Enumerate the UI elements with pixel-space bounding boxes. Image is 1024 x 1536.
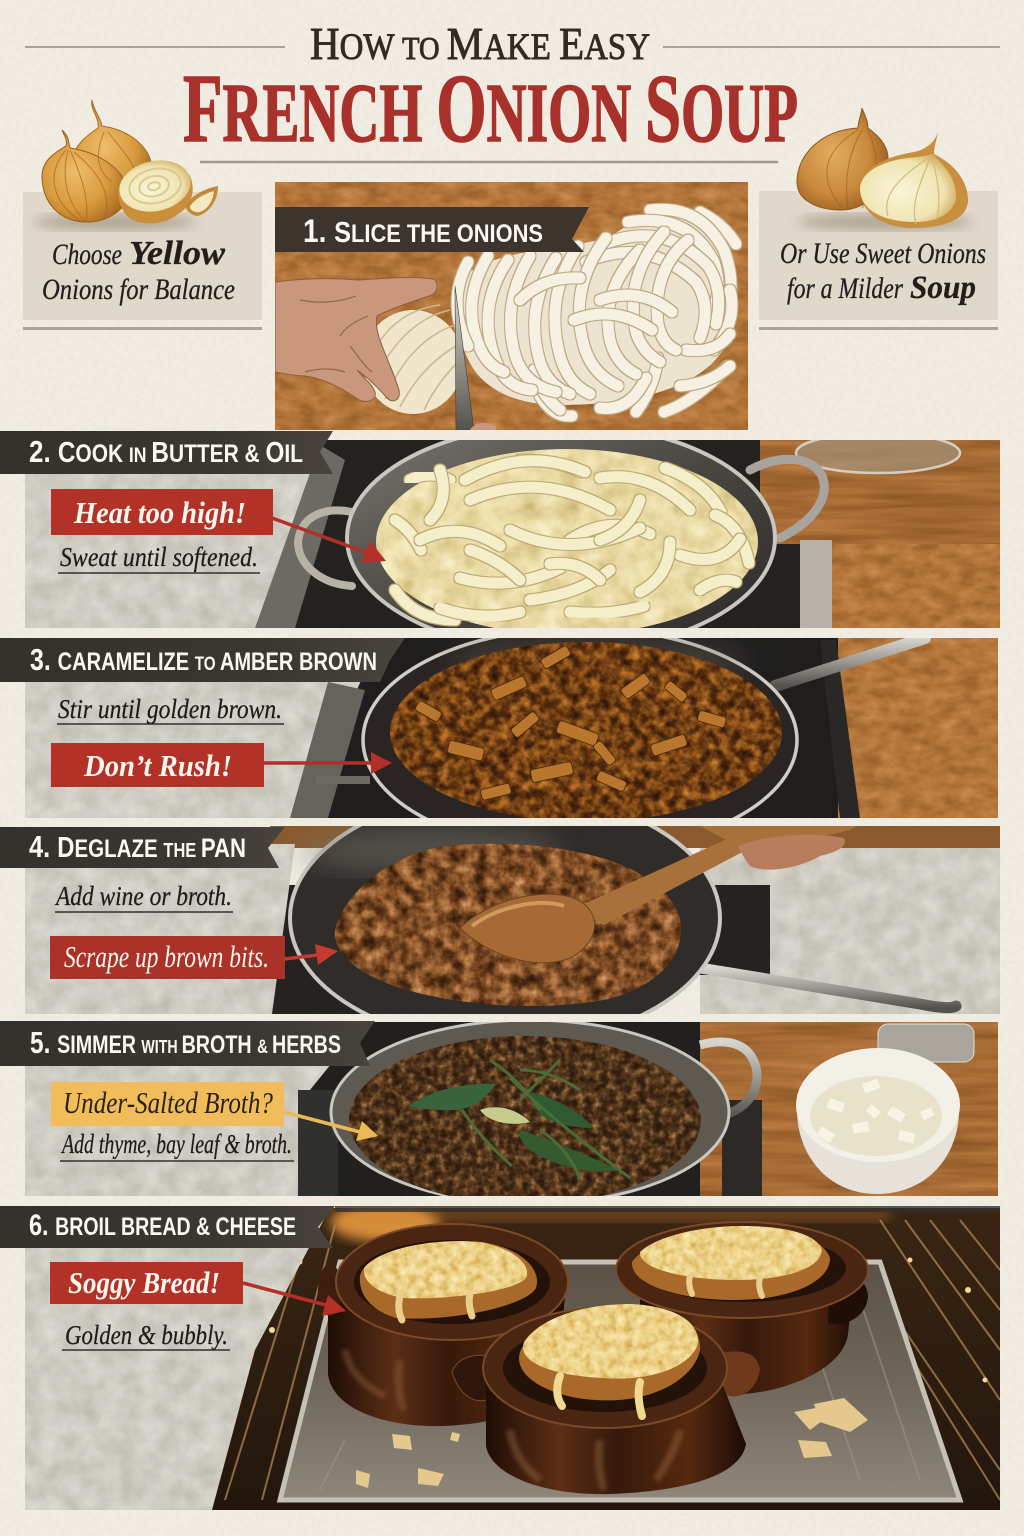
arrow: scrape to pan — [284, 944, 338, 965]
arrow: heat to onions — [272, 518, 386, 563]
banner: step 5: 5. SIMMER WITH BROTH & HERBS — [30, 1025, 341, 1060]
photo: bowl of chopped onions — [796, 1024, 974, 1194]
title block: FRENCH ONION SOUP — [183, 55, 798, 163]
panel: step 2 cook in butter and oil — [0, 431, 1000, 628]
callout: don't rush: Don’t Rush! — [83, 748, 232, 783]
note: sweat until softened: Sweat until softened. — [60, 542, 258, 572]
note: add thyme bay leaf and broth: Add thyme, bay leaf & broth. — [61, 1129, 292, 1159]
label: choose yellow: Choose — [52, 238, 122, 271]
panel: step 4 deglaze — [0, 826, 1000, 1014]
photo: pan with deglazing onions — [288, 826, 722, 1014]
arrow: broth to soup — [284, 1112, 378, 1141]
banner: step 1: 1. SLICE THE ONIONS — [303, 213, 543, 249]
banner: step 2: 2. COOK IN BUTTER & OIL — [29, 434, 303, 469]
banner: step 4: 4. DEGLAZE THE PAN — [29, 829, 246, 864]
banner: step 3: 3. CARAMELIZE TO AMBER BROWN — [30, 642, 377, 677]
callout: heat too high — [51, 489, 273, 535]
callout: scrape up brown bits — [50, 936, 285, 979]
panel: step 6 broil — [0, 1202, 1000, 1510]
callout: scrape up brown bits: Scrape up brown bits. — [64, 939, 269, 974]
label: sweet onions: Soup — [910, 270, 976, 306]
callout: heat too high: Heat too high! — [73, 495, 246, 530]
photo: baking tray — [280, 1262, 960, 1500]
photo: knife — [455, 286, 474, 430]
photo: counter and stove — [25, 826, 1000, 1014]
photo: back left crock — [318, 1224, 568, 1426]
arrow: soggy bread to crock — [243, 1283, 346, 1316]
arrow: don't rush to pan — [264, 752, 392, 774]
title block: HOW TO MAKE EASY — [310, 18, 650, 69]
photo: simmering pan — [331, 1020, 757, 1204]
photo: stove and board — [25, 638, 1000, 818]
banner: step 4 — [0, 827, 285, 868]
callout: under-salted broth — [51, 1082, 284, 1126]
callout: don't rush — [51, 743, 264, 787]
label: choose yellow: Yellow — [129, 235, 225, 272]
note: golden and bubbly: Golden & bubbly. — [65, 1320, 228, 1350]
photo: front crock — [452, 1304, 760, 1494]
photo: back right crock — [616, 1222, 868, 1395]
photo: pan handle — [700, 968, 956, 1008]
photo: oven interior — [25, 1202, 1000, 1510]
panel: step 5 simmer — [0, 1020, 1000, 1204]
panel: choose yellow onions — [23, 100, 262, 330]
panel: step 1 slice the onions — [275, 182, 748, 434]
photo: pan of caramelized onions — [361, 638, 931, 818]
icon: yellow onions — [33, 100, 218, 230]
note: add wine or broth: Add wine or broth. — [54, 881, 232, 911]
label: choose yellow: Onions for Balance — [42, 273, 235, 306]
banner: step 6: 6. BROIL BREAD & CHEESE — [29, 1209, 296, 1242]
photo: counter and stove — [25, 1022, 1000, 1196]
panel: step 3 caramelize — [0, 638, 998, 818]
photo: crumbs — [356, 1398, 868, 1488]
label: sweet onions: for a Milder — [787, 272, 903, 305]
photo: stove and wood counter — [25, 433, 1000, 628]
banner: step 6 — [0, 1206, 1000, 1248]
banner: step 2 — [0, 431, 333, 474]
photo: hand — [275, 277, 437, 402]
title block — [25, 18, 1000, 163]
note: stir until golden brown: Stir until golden brown. — [58, 694, 282, 724]
photo: pan with onions — [294, 440, 829, 628]
photo: sliced onions — [455, 209, 736, 416]
photo: wooden spoon and hand — [460, 826, 856, 963]
callout: under-salted broth: Under-Salted Broth? — [63, 1085, 273, 1120]
callout: soggy bread: Soggy Bread! — [68, 1265, 220, 1300]
banner: step 5 — [0, 1021, 375, 1066]
banner: step 1 — [275, 207, 589, 252]
photo: bay leaves and thyme — [408, 1060, 630, 1180]
panel: sweet onions — [759, 108, 998, 330]
icon: sweet onions — [797, 108, 973, 230]
photo: onion half being cut — [363, 305, 463, 414]
